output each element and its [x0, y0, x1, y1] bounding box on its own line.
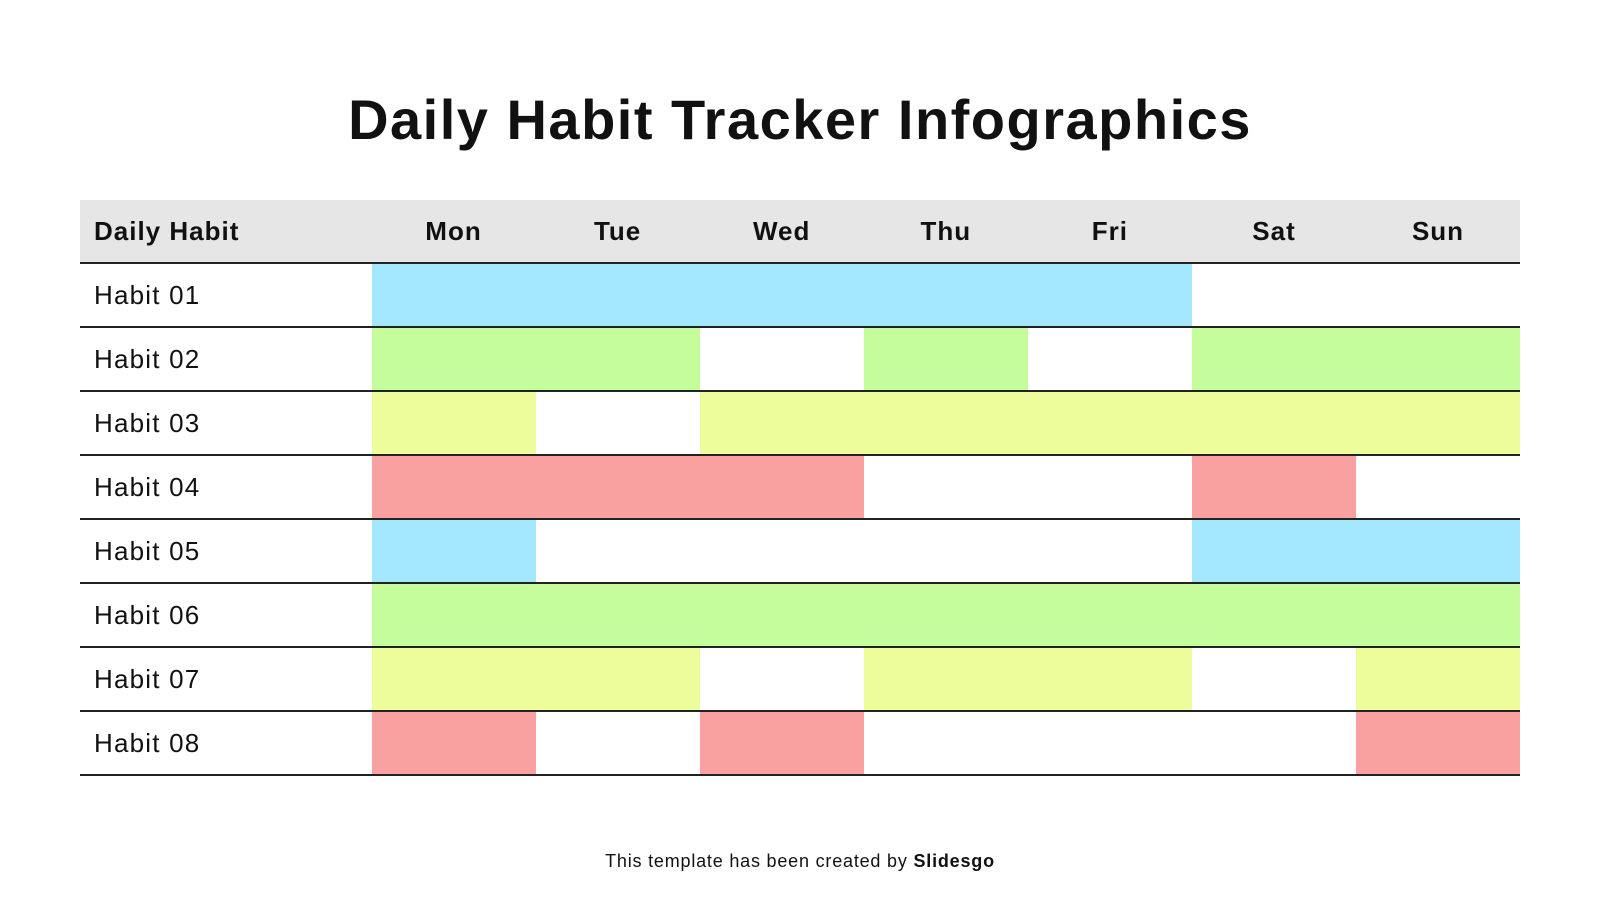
row: Habit 07 [94, 648, 1520, 710]
row: Habit 01: Habit 01 [94, 280, 200, 310]
table header: Thu [920, 216, 971, 246]
table header: Tue [594, 216, 641, 246]
table header [80, 200, 1520, 263]
table header: Mon [425, 216, 482, 246]
row: Habit 07: Habit 07 [94, 664, 200, 694]
row: Habit 05 [94, 520, 1520, 582]
row: Habit 05: Habit 05 [94, 536, 200, 566]
footer credit: This template has been created by Slidesgo [605, 851, 995, 871]
table header: Sat [1252, 216, 1296, 246]
row: Habit 06: Habit 06 [94, 600, 200, 630]
table header: Sun [1412, 216, 1464, 246]
row: Habit 06 [94, 584, 1520, 646]
row: Habit 08 [94, 712, 1520, 774]
table header: Wed [753, 216, 810, 246]
row: Habit 01 [94, 264, 1192, 326]
row: Habit 04: Habit 04 [94, 472, 200, 502]
row: Habit 02: Habit 02 [94, 344, 200, 374]
row: Habit 02 [94, 328, 1520, 390]
table header: Daily Habit [94, 216, 239, 246]
title: Daily Habit Tracker Infographics [348, 88, 1252, 151]
row: Habit 04 [94, 456, 1356, 518]
row: Habit 03 [94, 392, 1520, 454]
row: Habit 03: Habit 03 [94, 408, 200, 438]
table header: Fri [1092, 216, 1128, 246]
row: Habit 08: Habit 08 [94, 728, 200, 758]
